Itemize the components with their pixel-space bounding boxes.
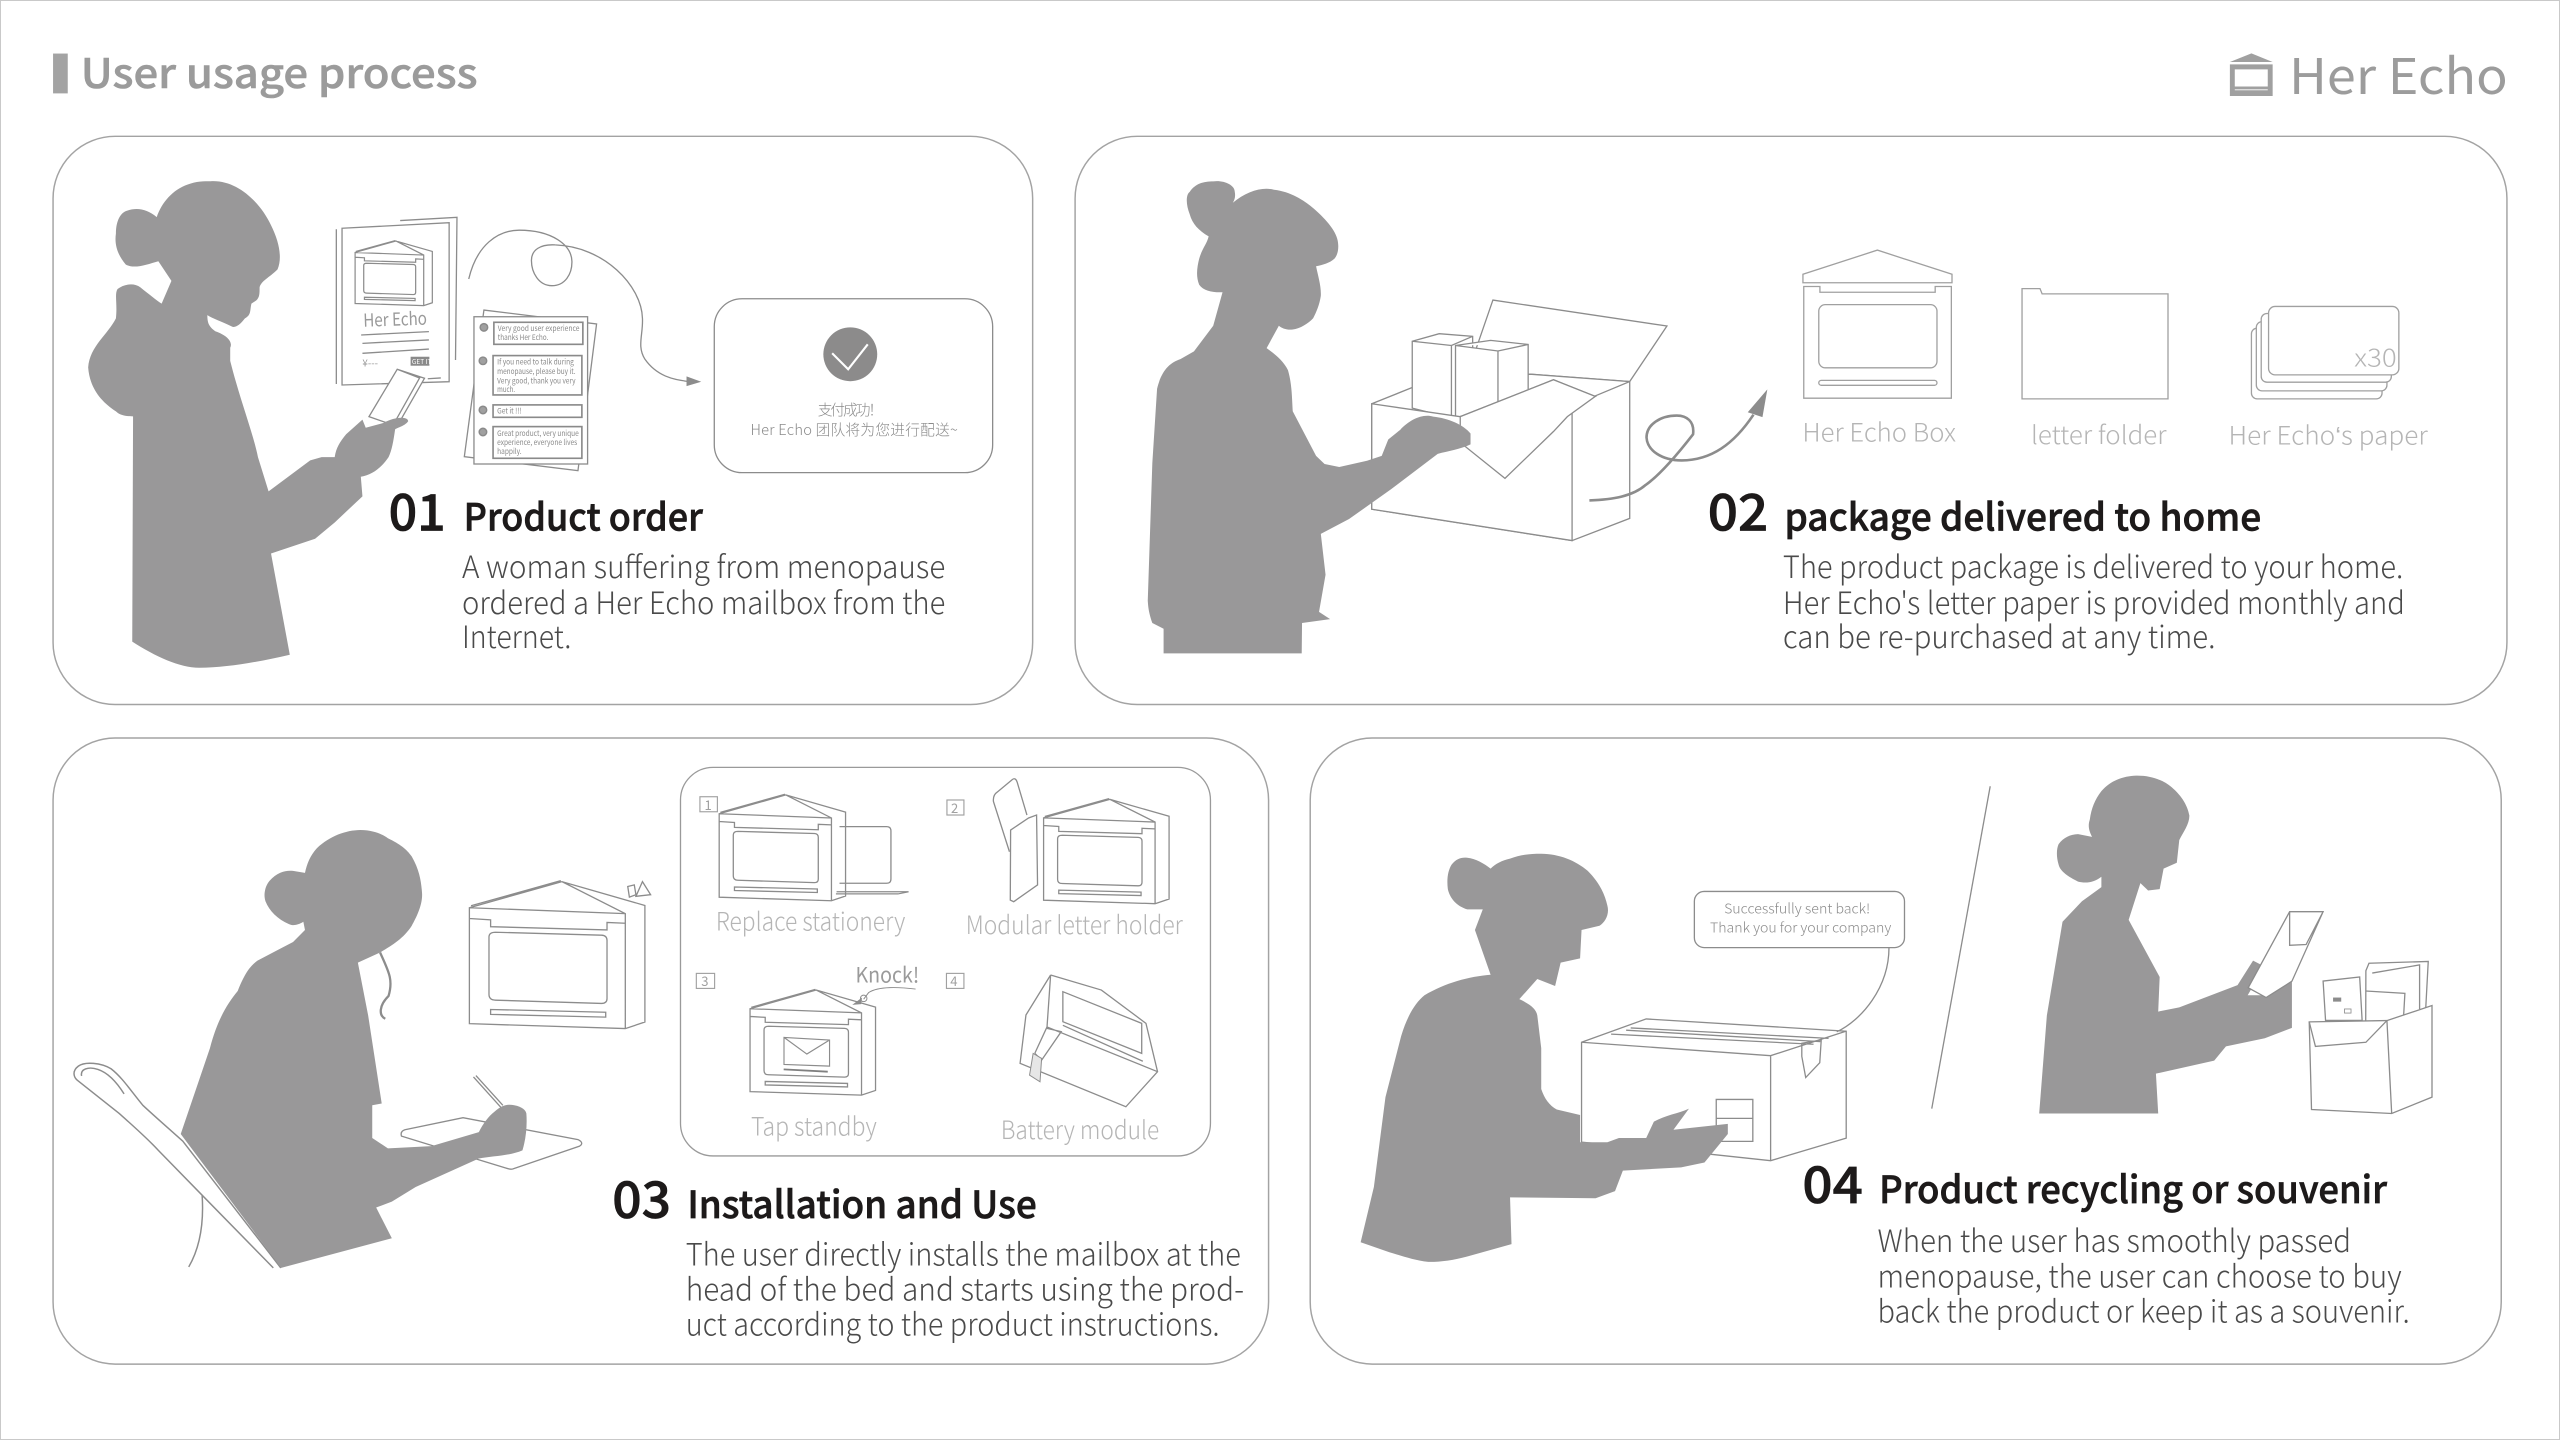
brand logo: Her Echo	[2289, 38, 2508, 109]
step description 03	[686, 1229, 1244, 1345]
user reviews sheet: happily.	[497, 446, 522, 457]
step description 01: ordered a Her Echo mailbox from the	[462, 578, 945, 623]
feature 3: tap standby: Tap standby	[751, 1108, 877, 1144]
speech bubble: Successfully sent back!	[1724, 897, 1870, 917]
item: letter folder	[2022, 289, 2168, 452]
panel: 02 package delivered	[1075, 136, 2507, 704]
panel: 03 installation and use	[53, 738, 1269, 1364]
phone	[369, 369, 424, 425]
item: Her Echo box: Her Echo Box	[1802, 414, 1956, 450]
step description 04: menopause, the user can choose to buy	[1878, 1251, 2402, 1296]
user reviews sheet: menopause, please buy it.	[497, 366, 576, 377]
step description 03: head of the bed and starts using the prod-	[686, 1264, 1244, 1309]
open keepsake box	[2309, 961, 2432, 1113]
return parcel box	[1582, 1019, 1846, 1161]
step heading 03: 03	[612, 1159, 671, 1233]
item: Her Echo paper stack: x30	[2354, 340, 2397, 375]
step description 01	[462, 542, 945, 657]
payment success card	[714, 299, 993, 473]
step description 02: Her Echo's letter paper is provided monthly and	[1783, 578, 2405, 623]
step description 01: Internet.	[462, 612, 571, 657]
feature 3: tap standby: 3	[701, 971, 708, 990]
feature 1: replace stationery	[700, 794, 909, 938]
curved arrow	[469, 230, 701, 386]
step heading 01: 01	[389, 472, 446, 546]
speech bubble	[1694, 891, 1904, 1032]
step description 03: uct according to the product instructions.	[686, 1300, 1220, 1345]
feature 2: modular letter holder: 2	[951, 798, 958, 817]
speech bubble: Thank you for your company	[1710, 917, 1891, 937]
user reviews sheet	[464, 310, 597, 471]
user reviews sheet: much.	[497, 384, 515, 395]
step heading 02: 02	[1708, 472, 1768, 546]
feature 3: tap standby	[696, 959, 919, 1144]
product poster: ¥---	[362, 356, 378, 370]
step heading 04	[1802, 1144, 2388, 1218]
step description 04	[1878, 1216, 2410, 1331]
step heading 03: Installation and Use	[687, 1174, 1037, 1229]
feature 4: battery module	[946, 971, 1159, 1147]
step heading 01	[389, 472, 703, 546]
step description 03: The user directly installs the mailbox at the	[686, 1229, 1241, 1274]
product poster: Her Echo	[363, 305, 427, 333]
user reviews sheet: experience, everyone lives	[497, 437, 578, 448]
woman silhouette holding parcel	[1361, 854, 1728, 1262]
user reviews sheet: Very good user experience	[498, 323, 579, 334]
wall mounted mailbox	[469, 881, 651, 1029]
looping arrow to contents	[1589, 389, 1767, 500]
seated woman silhouette	[181, 830, 527, 1268]
feature 2: modular letter holder	[947, 779, 1184, 942]
step description 04: back the product or keep it as a souvenir.	[1878, 1286, 2410, 1331]
open delivery box with parcels	[1372, 300, 1667, 541]
hair strand	[380, 952, 391, 1019]
letter in hand	[2248, 912, 2323, 998]
user reviews sheet: If you need to talk during	[497, 356, 575, 367]
step heading 02	[1708, 472, 2261, 546]
writing tablet and pen	[401, 1076, 582, 1169]
user reviews sheet: Get it !!!	[497, 406, 522, 417]
feature 4: battery module: 4	[950, 971, 957, 990]
user reviews sheet: Very good, thank you very	[497, 375, 576, 386]
feature 1: replace stationery: Replace stationery	[716, 902, 906, 938]
step heading 02: package delivered to home	[1784, 487, 2261, 542]
woman silhouette reading letter	[2039, 776, 2292, 1113]
step description 02: The product package is delivered to your home.	[1783, 542, 2403, 587]
step heading 03	[612, 1159, 1037, 1233]
payment success card: Her Echo 团队将为您进行配送~	[751, 419, 958, 440]
step heading 01: Product order	[464, 487, 703, 542]
step heading 04: Product recycling or souvenir	[1879, 1159, 2388, 1214]
chair	[74, 1063, 281, 1268]
panel: 04 recycling or souvenir	[1310, 738, 2501, 1364]
feature 1: replace stationery: 1	[704, 795, 712, 814]
step description 01: A woman suffering from menopause	[462, 542, 945, 587]
page title: User usage process	[81, 41, 478, 100]
product poster	[336, 217, 457, 385]
step description 02	[1783, 542, 2405, 657]
panel: 01 product order	[53, 136, 1033, 704]
payment success card: 支付成功！	[818, 399, 883, 420]
woman silhouette ordering	[88, 181, 408, 668]
woman silhouette receiving box	[1148, 181, 1471, 653]
item: Her Echo paper stack: Her Echo‘s paper	[2229, 416, 2429, 452]
user reviews sheet: Great product, very unique	[497, 428, 579, 439]
product poster: GET IT	[412, 356, 432, 366]
item: Her Echo box	[1802, 250, 1956, 450]
feature 3: tap standby: Knock!	[856, 959, 919, 990]
feature panel	[680, 767, 1210, 1156]
feature 4: battery module: Battery module	[1001, 1111, 1159, 1147]
step description 04: When the user has smoothly passed	[1878, 1216, 2351, 1261]
user reviews sheet: thanks Her Echo.	[498, 332, 548, 343]
step heading 04: 04	[1802, 1144, 1863, 1218]
item: letter folder: letter folder	[2031, 416, 2167, 452]
step description 02: can be re-purchased at any time.	[1783, 612, 2216, 657]
feature 2: modular letter holder: Modular letter holder	[966, 906, 1184, 942]
item: Her Echo paper stack	[2229, 306, 2429, 452]
